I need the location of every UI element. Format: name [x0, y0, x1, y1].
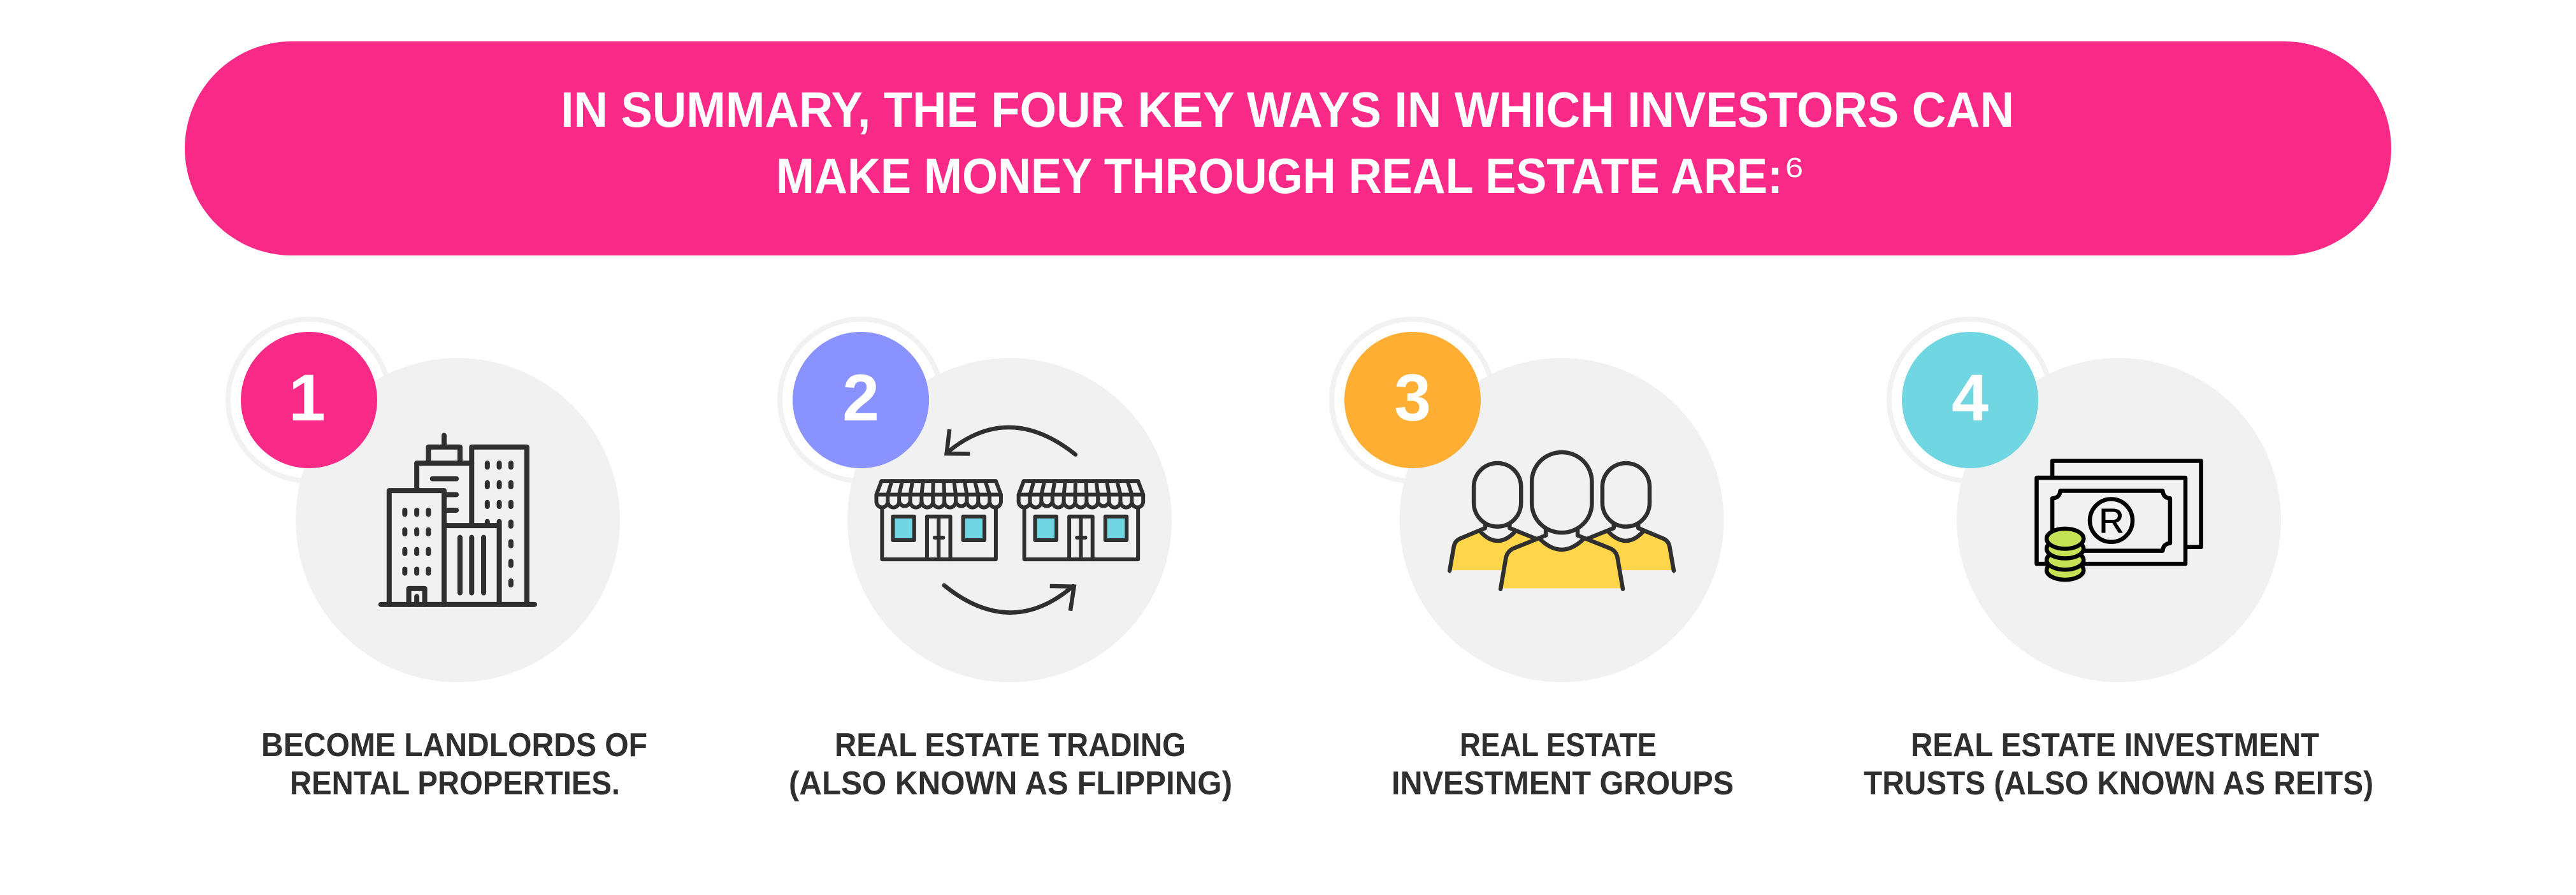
number badge 4 [1902, 332, 2038, 468]
label 2: REAL ESTATE TRADING [835, 727, 1186, 764]
number badge 3: 3 [1394, 361, 1431, 435]
arrow: bottom, left to right [944, 585, 1074, 613]
icon background circle 3 [1399, 358, 1724, 682]
number badge 2 [793, 332, 929, 468]
icon: banknotes and coins [2037, 461, 2201, 580]
number ring 4 [1889, 319, 2051, 481]
body fills [1450, 531, 1674, 589]
number badge 2: 2 [842, 361, 879, 435]
label 1: RENTAL PROPERTIES. [290, 765, 620, 802]
panel: step 2 trading [780, 319, 1232, 802]
person centre [1500, 452, 1623, 589]
label 3: INVESTMENT GROUPS [1392, 765, 1734, 802]
person right [1588, 463, 1674, 571]
icon: two shops with exchange arrows [876, 427, 1143, 613]
title banner: IN SUMMARY, THE FOUR KEY WAYS IN WHICH INVESTORS CAN [561, 82, 2014, 138]
label 3 [1392, 727, 1734, 802]
title banner [185, 41, 2391, 255]
number badge 3 [1344, 332, 1481, 468]
number badge 1: 1 [289, 361, 326, 435]
label 2: (ALSO KNOWN AS FLIPPING) [789, 765, 1232, 802]
number ring 1 [228, 319, 390, 481]
label 1: BECOME LANDLORDS OF [261, 727, 647, 764]
arrow: top, right to left [947, 427, 1076, 455]
icon: left shop [876, 481, 1001, 559]
panel: step 3 investment groups [1332, 319, 1734, 802]
label 4 [1864, 727, 2373, 802]
panel: step 4 REITs [1864, 319, 2373, 802]
label 4: TRUSTS (ALSO KNOWN AS REITS) [1864, 765, 2373, 802]
panel: step 1 landlords [228, 319, 647, 802]
icon background circle 4 [1957, 358, 2281, 682]
title banner: MAKE MONEY THROUGH REAL ESTATE ARE: [776, 148, 1783, 204]
number badge 1 [241, 332, 377, 468]
number badge 4: 4 [1952, 361, 1989, 435]
label 3: REAL ESTATE [1460, 727, 1657, 764]
label 2 [789, 727, 1232, 802]
number ring 2 [780, 319, 942, 481]
number ring 3 [1332, 319, 1493, 481]
icon background circle 2 [847, 358, 1172, 682]
title banner: 6 [1785, 152, 1803, 183]
icon: city buildings [381, 436, 535, 605]
icon: banknotes and coins: R [2099, 502, 2124, 540]
label 1 [261, 727, 647, 802]
person left [1450, 463, 1536, 571]
icon: right shop [1019, 481, 1143, 559]
icon: three people [1450, 452, 1674, 589]
label 4: REAL ESTATE INVESTMENT [1911, 727, 2319, 764]
icon background circle 1 [296, 358, 620, 682]
